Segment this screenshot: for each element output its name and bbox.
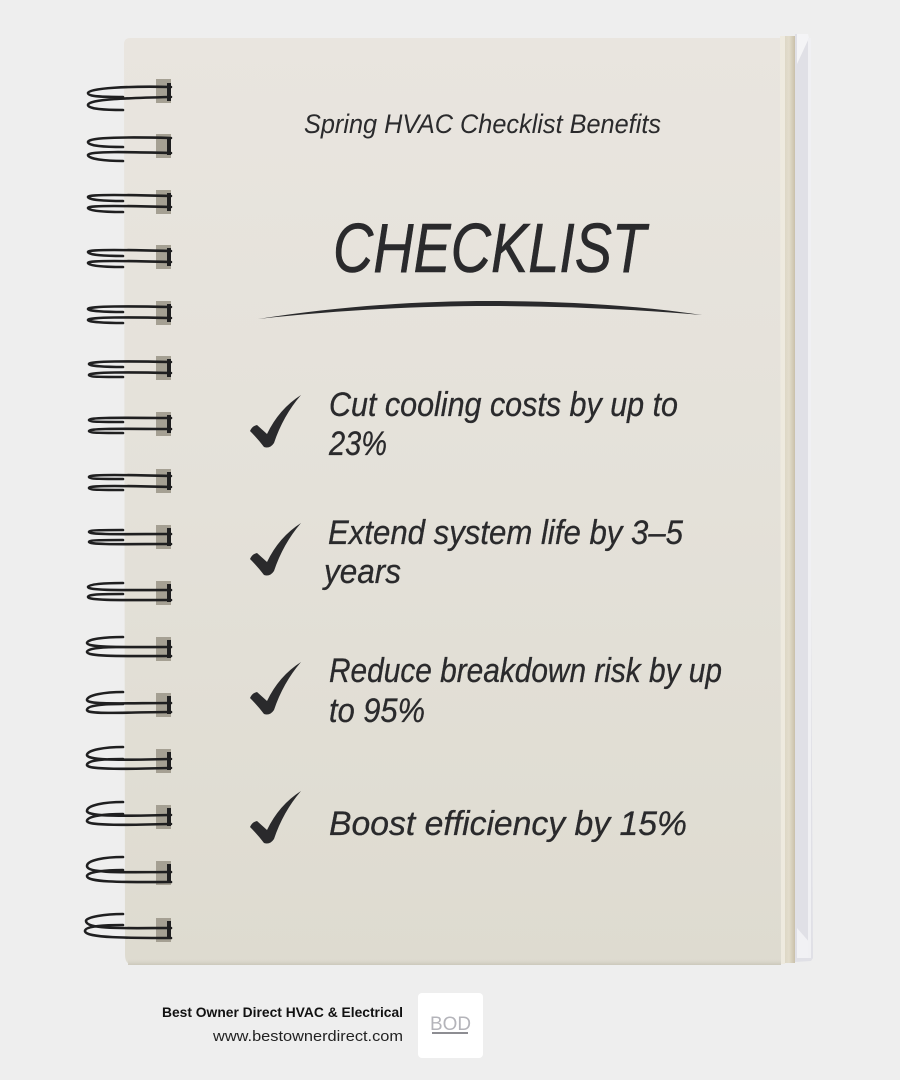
- ring 1: [88, 79, 171, 110]
- ring 16: [85, 914, 171, 942]
- heading: CHECKLIST: [333, 209, 649, 287]
- ring 10: [88, 581, 171, 605]
- ring 6: [89, 356, 171, 380]
- item text: Extend system life by 3–5: [328, 514, 683, 552]
- ring 11: [87, 637, 171, 661]
- ring 12: [87, 692, 171, 717]
- heading underline: [258, 301, 702, 319]
- item: system life: [250, 514, 683, 591]
- spiral binding: [85, 79, 171, 942]
- ring 9: [89, 525, 171, 549]
- footer website: www.bestownerdirect.com: [212, 1028, 403, 1045]
- item text: Boost efficiency by 15%: [329, 805, 687, 843]
- ring 14: [87, 802, 171, 829]
- ring 8: [89, 469, 171, 493]
- ring 2: [88, 134, 171, 161]
- item text: Reduce breakdown risk by up: [329, 652, 722, 690]
- ring 3: [88, 190, 171, 214]
- item text: 23%: [328, 425, 387, 463]
- ring 7: [89, 412, 171, 436]
- logo mark: BOD: [430, 1014, 471, 1035]
- front page: [124, 38, 781, 965]
- subtitle: Spring HVAC Checklist Benefits: [304, 109, 661, 139]
- ring 5: [88, 301, 171, 325]
- notebook body: [124, 34, 813, 965]
- back cover: [795, 34, 813, 962]
- icon: check mark: [250, 395, 301, 448]
- page stack edge: [780, 36, 795, 964]
- item: breakdown risk: [250, 652, 722, 730]
- item: efficiency: [250, 791, 687, 844]
- logo card: [418, 993, 483, 1058]
- item: cooling costs: [250, 386, 678, 463]
- icon: check mark: [250, 791, 301, 844]
- ring 4: [88, 245, 171, 269]
- ring 15: [87, 857, 171, 885]
- icon: check mark: [250, 523, 301, 576]
- logo underline: [432, 1032, 468, 1034]
- footer company name: Best Owner Direct HVAC & Electrical: [162, 1005, 403, 1020]
- icon: check mark: [250, 662, 301, 714]
- item text: years: [322, 553, 401, 591]
- item text: to 95%: [329, 692, 425, 730]
- ring 13: [87, 747, 171, 773]
- item text: Cut cooling costs by up to: [329, 386, 678, 424]
